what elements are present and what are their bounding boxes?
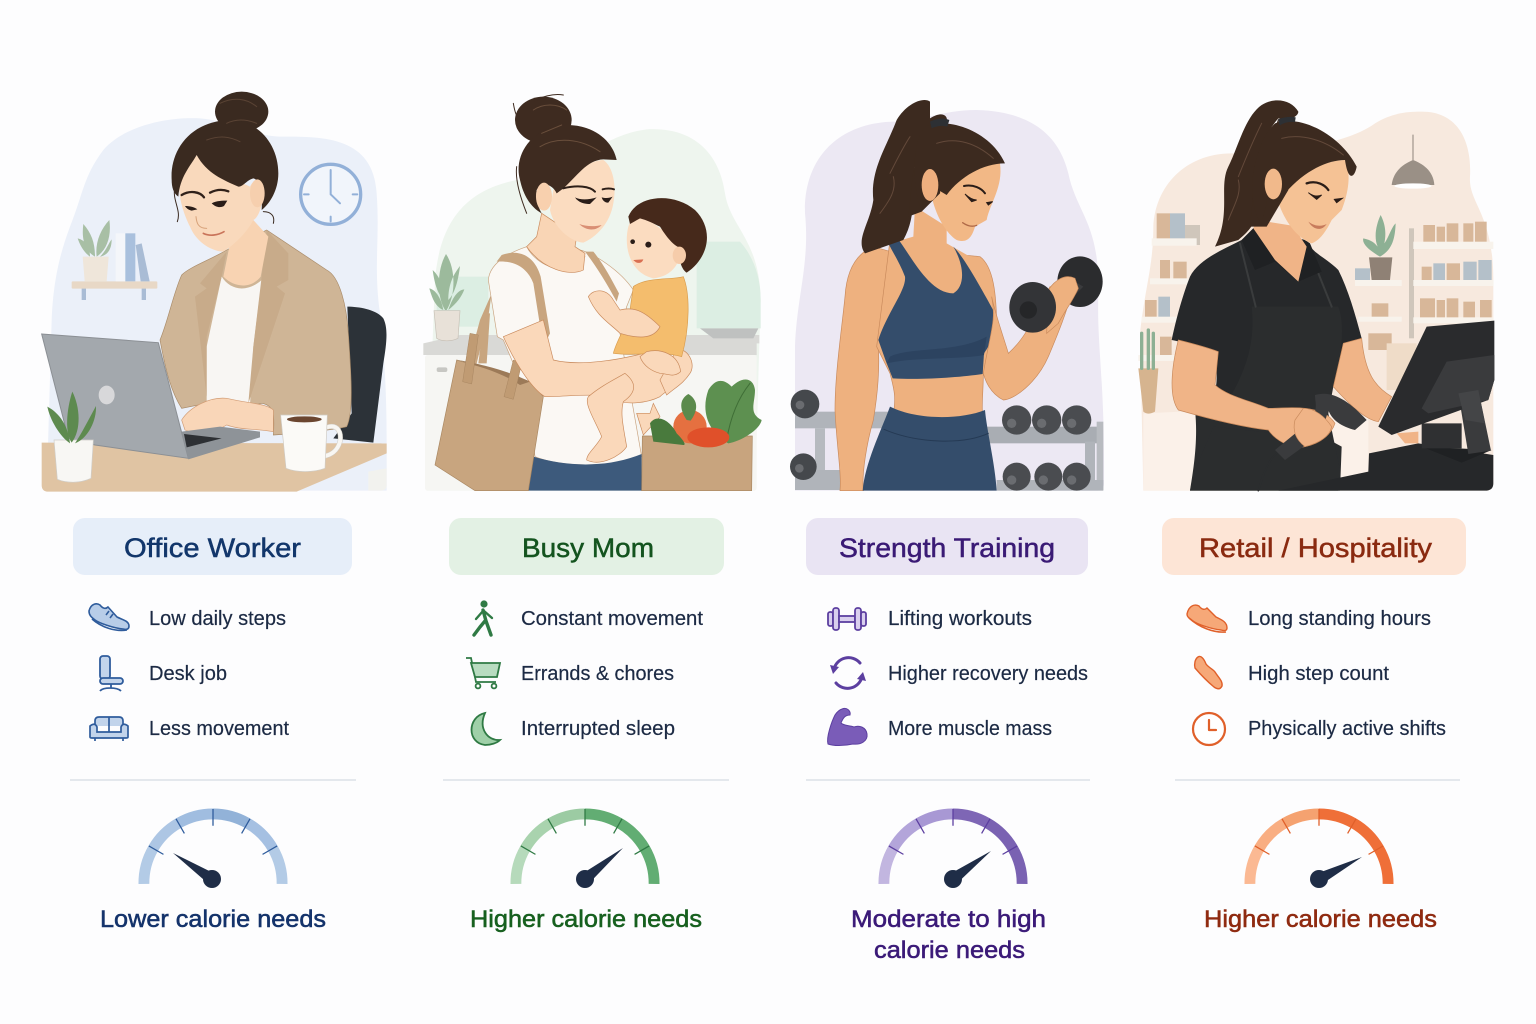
icon: shoe print step: [1195, 656, 1222, 689]
column: office worker: [42, 92, 387, 933]
gauge: higher calorie needs (green): [516, 809, 654, 888]
outcome: higher calorie needs (orange): Higher calorie needs: [1204, 906, 1437, 933]
outcome: higher calorie needs (green): Higher calorie needs: [470, 906, 702, 933]
outcome: moderate to high calorie needs: Moderate to high: [851, 906, 1046, 933]
icon: recovery arrows: [830, 658, 866, 688]
heading: busy mom: Busy Mom: [522, 533, 654, 563]
heading: retail / hospitality: Retail / Hospitality: [1199, 533, 1433, 563]
heading: retail / hospitality: [1162, 518, 1466, 575]
list: office worker factors: Low daily steps: [149, 608, 286, 630]
list: office worker factors: [89, 604, 289, 741]
icon: shopping cart: [466, 658, 500, 688]
icon: walking person: [474, 600, 492, 635]
icon: office chair: [100, 656, 123, 691]
icon: sofa: [90, 717, 128, 741]
list: busy mom factors: Constant movement: [521, 608, 703, 630]
illustration: woman lifting a dumbbell: [790, 100, 1104, 491]
list: strength training factors: Lifting workouts: [888, 608, 1032, 630]
outcome: moderate to high calorie needs: calorie needs: [874, 937, 1025, 964]
list: retail factors: Physically active shifts: [1248, 718, 1446, 740]
heading: office worker: [73, 518, 352, 575]
heading: strength training: Strength Training: [839, 533, 1055, 563]
outcome: lower calorie needs: Lower calorie needs: [100, 906, 326, 933]
icon: dumbbell: [828, 608, 866, 630]
illustration: cashier with scanner in a shop: [1138, 100, 1494, 491]
outcome: moderate to high calorie needs: [851, 906, 1046, 964]
list: strength training factors: More muscle mass: [888, 718, 1052, 740]
gauge: lower calorie needs: [144, 809, 282, 888]
list: retail factors: High step count: [1248, 663, 1389, 685]
list: office worker factors: Less movement: [149, 718, 289, 740]
illustration: woman at laptop in office: [42, 92, 387, 492]
heading: office worker: Office Worker: [124, 533, 301, 563]
list: busy mom factors: [466, 600, 703, 745]
column: strength training: [790, 100, 1104, 964]
heading: strength training: [806, 518, 1088, 575]
list: office worker factors: Desk job: [149, 663, 227, 685]
icon: flexed bicep: [828, 708, 867, 746]
icon: sneaker: [89, 604, 129, 630]
heading: busy mom: [449, 518, 724, 575]
column: retail / hospitality: [1138, 100, 1494, 933]
list: busy mom factors: Errands & chores: [521, 663, 674, 685]
column: busy mom: [423, 95, 762, 933]
gauge: moderate to high calorie needs: [884, 809, 1022, 888]
icon: running shoe: [1187, 605, 1227, 632]
list: busy mom factors: Interrupted sleep: [521, 718, 675, 740]
icon: clock: [1193, 713, 1225, 745]
list: retail factors: [1187, 605, 1446, 745]
icon: crescent moon: [472, 713, 500, 745]
list: strength training factors: [828, 608, 1088, 746]
list: retail factors: Long standing hours: [1248, 608, 1431, 630]
illustration: mother with child and groceries: [423, 95, 762, 491]
list: strength training factors: Higher recovery needs: [888, 663, 1088, 685]
gauge: higher calorie needs (orange): [1250, 809, 1388, 888]
